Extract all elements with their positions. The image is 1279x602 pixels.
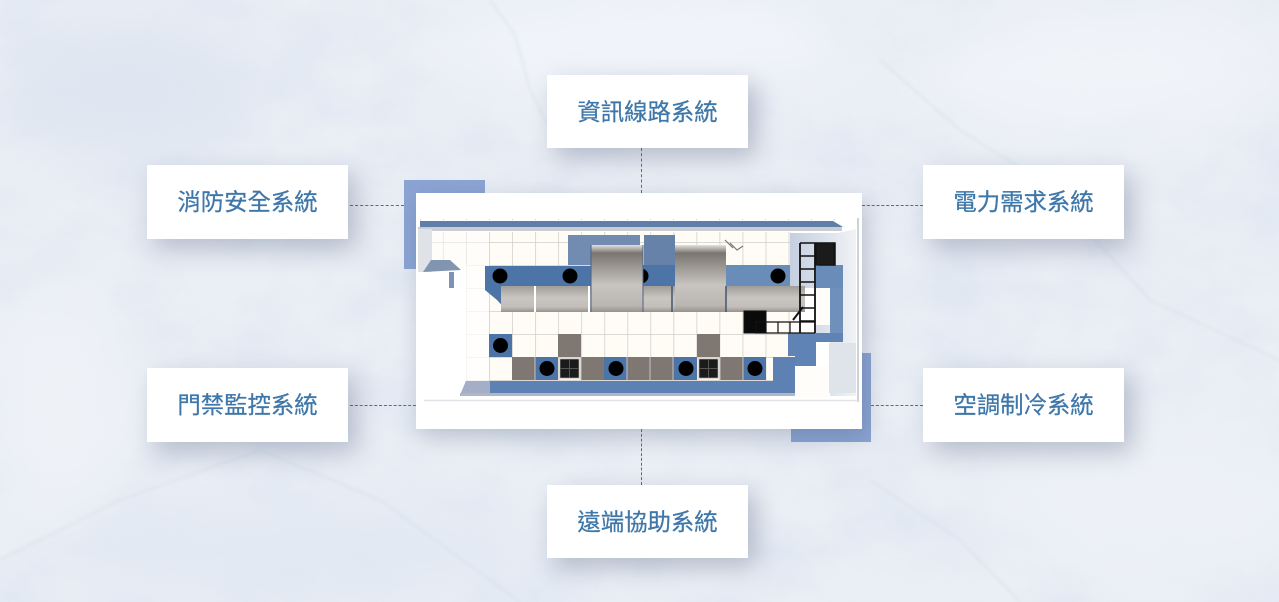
card: 電力需求系統: 電力需求系統 <box>953 189 1094 215</box>
grid floor <box>432 232 793 381</box>
tile row: lower <box>489 334 766 380</box>
card: 資訊線路系統: 資訊線路系統 <box>577 99 718 125</box>
card: 消防安全系統: 消防安全系統 <box>177 189 318 215</box>
card: 資訊線路系統 <box>547 75 748 148</box>
card: 消防安全系統 <box>147 165 348 239</box>
connector: upper right <box>862 205 923 206</box>
card: 空調制冷系統: 空調制冷系統 <box>953 392 1094 418</box>
connector: top <box>641 148 642 193</box>
accent square: bottom right <box>791 353 871 442</box>
card: 遠端協助系統: 遠端協助系統 <box>577 509 718 535</box>
card: 遠端協助系統 <box>547 485 748 558</box>
blue raised floor <box>485 235 791 312</box>
floor vents <box>492 268 786 284</box>
connector: bottom <box>641 429 642 485</box>
card: 門禁監控系統 <box>147 368 348 442</box>
connector: lower right <box>871 405 923 406</box>
accent square: top left <box>404 180 485 269</box>
card: 電力需求系統 <box>923 165 1124 239</box>
ladder and black frame <box>725 240 835 333</box>
card: 空調制冷系統 <box>923 368 1124 442</box>
floor plan panel <box>408 190 878 448</box>
connector: upper left <box>350 205 404 206</box>
card: 門禁監控系統: 門禁監控系統 <box>177 392 318 418</box>
connector: lower left <box>350 405 416 406</box>
right side room <box>424 218 859 402</box>
ducts <box>501 245 805 312</box>
top wall <box>418 220 843 288</box>
